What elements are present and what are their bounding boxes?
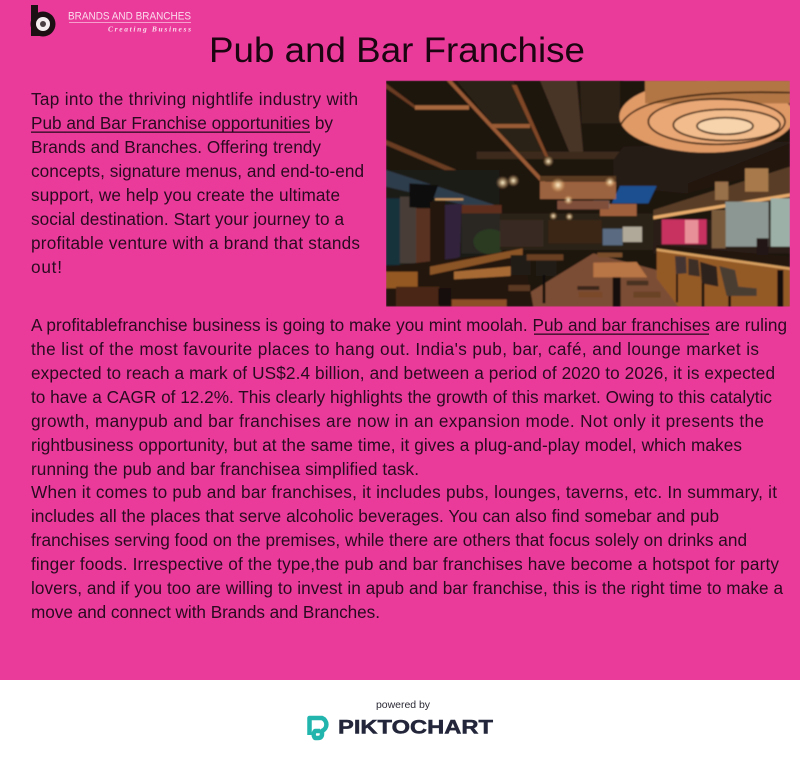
text block: body: A profitablefranchise business is going to make you mint moolah. Pub and bar franchises are ruling [31,315,787,335]
left banquette and tables [430,248,523,275]
text block: body: finger foods. Irrespective of the type,the pub and bar franchises have become a hotspot for party [31,554,779,574]
text block: intro: profitable venture with a brand that stands [31,233,360,253]
powered by label: powered by [376,699,431,711]
logo: Brands and Branches [30,5,191,36]
floor [530,252,678,307]
text block: body [31,315,787,622]
center table [593,262,647,277]
text block: body: to have a CAGR of 12.2%. This clearly highlights the growth of this market. Owing to this catalytic [31,387,772,407]
back wall [500,213,657,250]
photo: pub interior [386,80,790,307]
icon: Piktochart logo [310,718,326,738]
text block: body: When it comes to pub and bar franchises, it includes pubs, lounges, taverns, etc. In summary, it [31,482,777,502]
bar counter [656,245,752,254]
text block: body: growth, manypub and bar franchises are now in an expansion mode. Not only it presents the [31,411,764,431]
title: Pub and Bar Franchise [209,31,585,70]
text block: body: expected to reach a mark of US$2.4 billion, and between a period of 2020 to 2026, it is expected [31,363,775,383]
text block: intro: Tap into the thriving nightlife industry with [31,89,358,109]
hanging lamps [540,182,616,199]
Piktochart wordmark: PIKTOCHART [338,718,493,738]
pipes [447,81,550,187]
text block: body: includes all the places that serve alcoholic beverages. You can also find somebar and pub [31,506,719,526]
text block: body: rightbusiness opportunity, but at the same time, it gives a plug-and-play model, which makes [31,435,742,455]
right mezzanine [653,167,790,218]
logo name: BRANDS AND BRANCHES [68,10,191,22]
icon: b mark [30,5,56,36]
text block: intro: Pub and Bar Franchise opportunities by [31,113,333,133]
text block: body: move and connect with Brands and Branches. [31,602,380,622]
left wall [386,170,499,270]
text block: intro: concepts, signature menus, and end-to-end [31,161,364,181]
text block: body: running the pub and bar franchisea simplified task. [31,459,419,479]
logo tagline: Creating Business [108,24,191,34]
text block: intro: out! [31,257,62,277]
footer band [0,680,800,760]
blue and signage [612,186,657,203]
text block: intro: social destination. Start your journey to a [31,209,344,229]
text block: body: the list of the most favourite places to hang out. India's pub, bar, café, and lounge market is [31,339,759,359]
text block: intro: Brands and Branches. Offering trendy [31,137,321,157]
large lamp [618,90,790,154]
text block: intro [31,89,364,277]
text block: body: lovers, and if you too are willing to invest in apub and bar franchise, this is the right time to make a [31,578,783,598]
ceiling [386,81,623,157]
text block: body: franchises serving food on the premises, while there are others that focus solely on drinks and [31,530,747,550]
text block: intro: support, we help you create the ultimate [31,185,340,205]
